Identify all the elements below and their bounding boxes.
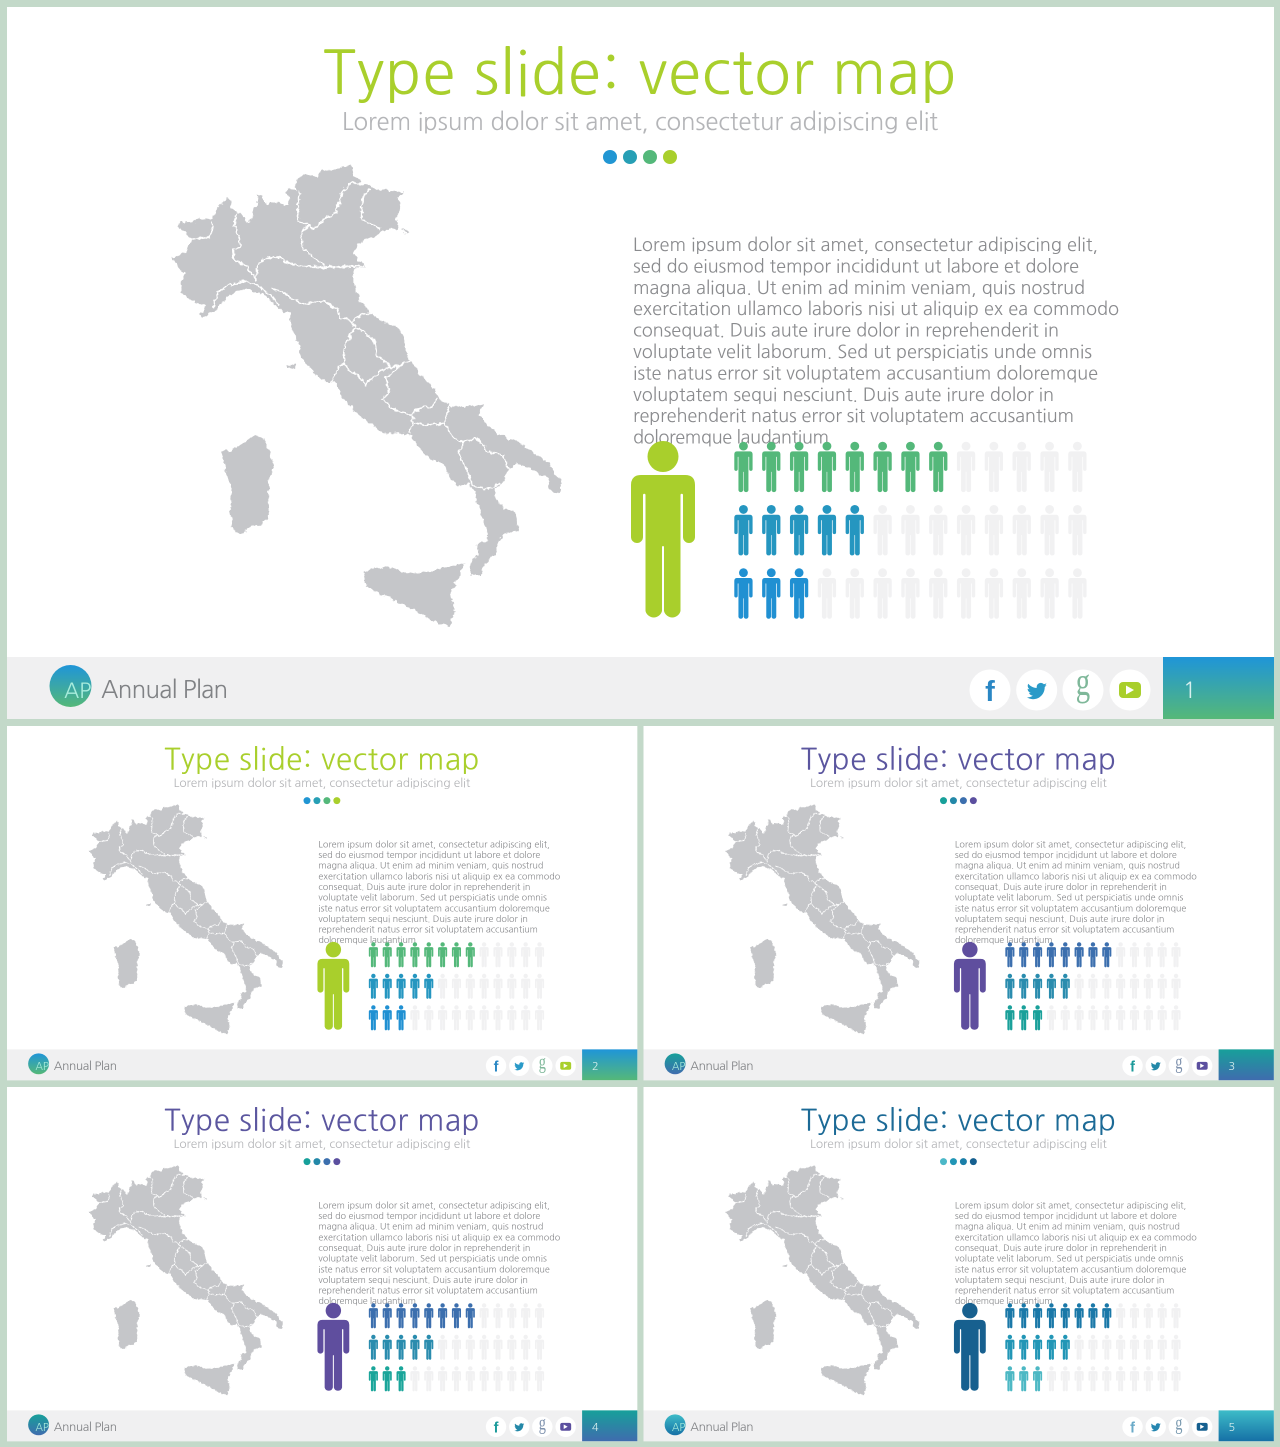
body text: magna aliqua. Ut enim ad minim veniam, quis nostrud [633,278,1085,297]
pictogram row 1: 8 of 13 [1005,942,1181,967]
logo badge: AP [64,681,91,702]
panel: slide 5 [644,1087,1274,1441]
pictogram row 2: 5 of 13 [369,1335,544,1360]
brand name: Annual Plan [54,1060,117,1072]
body text: Lorem ipsum dolor sit amet, consectetur adipiscing elit, [955,840,1186,849]
body text: iste natus error sit voluptatem accusantium doloremque [955,1265,1186,1274]
body text: exercitation ullamco laboris nisi ut aliquip ex ea commodo [955,1233,1197,1242]
subtitle: Lorem ipsum dolor sit amet, consectetur adipiscing elit [174,777,471,789]
brand name: Annual Plan [690,1421,753,1433]
footer bar [644,1410,1274,1441]
map of Italy [89,1165,283,1395]
page number box [1219,1049,1274,1080]
body text: sed do eiusmod tempor incididunt ut labore et dolore [633,256,1079,275]
footer bar [644,1049,1274,1080]
pictogram row 1: 8 of 13 [734,442,1087,492]
body text: Lorem ipsum dolor sit amet, consectetur adipiscing elit, [318,1201,550,1210]
body text: voluptatem sequi nesciunt. Duis aute irure dolor in [955,915,1164,924]
logo badge: AP [672,1061,685,1072]
pictogram row 3: 3 of 13 [734,568,1087,619]
body text: reprehenderit natus error sit voluptatem accusantium [955,926,1174,935]
page number box: 4 [592,1422,599,1433]
social icons [970,659,1150,710]
social icons [486,1051,576,1076]
social icons: f [1130,1420,1135,1436]
body text: magna aliqua. Ut enim ad minim veniam, quis nostrud [955,1223,1180,1232]
panel: slide 1 [7,7,1274,719]
pictogram row 1: 8 of 13 [369,942,544,967]
pagination dots [940,1158,977,1165]
body text: reprehenderit natus error sit voluptatem accusantium [318,1287,538,1296]
pagination dots [304,1158,340,1165]
body text: sed do eiusmod tempor incididunt ut labore et dolore [318,851,540,860]
body text: voluptatem sequi nesciunt. Duis aute irure dolor in [318,1276,528,1285]
title: Type slide: vector map [323,43,957,103]
title: Type slide: vector map [164,1105,480,1135]
large person icon [954,942,986,1030]
page number box: 2 [592,1061,599,1072]
brand name: Annual Plan [690,1060,753,1072]
body text [318,1201,561,1306]
body text: voluptatem sequi nesciunt. Duis aute irure dolor in [633,385,1054,404]
body text: consequat. Duis aute irure dolor in reprehenderit in [633,321,1059,340]
pictogram row 3: 3 of 13 [1005,1005,1181,1030]
body text: doloremque laudantium [318,936,416,945]
pictogram row 2: 5 of 13 [1005,1335,1181,1360]
social icons: f [985,676,995,708]
body text: voluptatem sequi nesciunt. Duis aute irure dolor in [318,915,528,924]
body text [318,840,561,945]
page number box [1219,1410,1274,1441]
large person icon [954,1303,986,1391]
footer bar [7,657,1274,719]
social icons: g [1175,1412,1183,1434]
body text [633,235,1119,447]
large person icon [631,441,695,617]
body text: reprehenderit natus error sit voluptatem accusantium [633,406,1074,425]
subtitle: Lorem ipsum dolor sit amet, consectetur adipiscing elit [810,777,1107,789]
logo badge [665,1414,686,1435]
body text: magna aliqua. Ut enim ad minim veniam, quis nostrud [318,1223,543,1232]
body text: voluptatem sequi nesciunt. Duis aute irure dolor in [955,1276,1164,1285]
social icons: f [494,1420,499,1436]
body text: Lorem ipsum dolor sit amet, consectetur adipiscing elit, [633,235,1098,254]
pictogram row 1: 8 of 13 [1005,1303,1181,1328]
body text: Lorem ipsum dolor sit amet, consectetur adipiscing elit, [318,840,550,849]
brand name: Annual Plan [101,678,228,702]
body text: voluptate velit laborum. Sed ut perspiciatis unde omnis [318,894,547,903]
map of Italy [89,804,283,1034]
footer bar [7,1410,637,1441]
brand name: Annual Plan [54,1421,117,1433]
pictogram row 1: 8 of 13 [369,1303,544,1328]
body text [955,1201,1197,1306]
pictogram row 3: 3 of 13 [369,1005,544,1030]
subtitle: Lorem ipsum dolor sit amet, consectetur adipiscing elit [342,110,938,134]
body text: magna aliqua. Ut enim ad minim veniam, quis nostrud [318,862,543,871]
pagination dots [940,797,977,804]
body text: exercitation ullamco laboris nisi ut aliquip ex ea commodo [318,1233,561,1242]
pagination dots [304,797,340,804]
page number box: 5 [1229,1422,1235,1433]
body text: iste natus error sit voluptatem accusantium doloremque [318,904,550,913]
large person icon [317,1303,349,1391]
page number box [582,1410,637,1441]
body text: iste natus error sit voluptatem accusantium doloremque [318,1265,550,1274]
body text: voluptate velit laborum. Sed ut perspiciatis unde omnis [633,342,1092,361]
logo badge [28,1053,49,1074]
page number box: 3 [1229,1061,1235,1072]
page number box [582,1049,637,1080]
logo badge [665,1053,686,1074]
body text: sed do eiusmod tempor incididunt ut labore et dolore [955,1212,1177,1221]
pictogram row 3: 3 of 13 [369,1366,544,1391]
subtitle: Lorem ipsum dolor sit amet, consectetur adipiscing elit [810,1138,1107,1150]
pictogram row 3: 3 of 13 [1005,1366,1181,1391]
body text: consequat. Duis aute irure dolor in reprehenderit in [318,1244,530,1253]
body text: doloremque laudantium [955,936,1052,945]
body text: iste natus error sit voluptatem accusantium doloremque [633,363,1098,382]
title: Type slide: vector map [164,744,480,774]
panel: slide 2 [7,726,637,1080]
logo badge: AP [35,1061,49,1072]
social icons: g [1076,659,1090,704]
large person icon [317,942,349,1030]
social icons [1122,1051,1212,1076]
social icons: f [1130,1059,1135,1075]
title: Type slide: vector map [801,1105,1116,1135]
title: Type slide: vector map [801,744,1116,774]
body text: doloremque laudantium [955,1297,1052,1306]
logo badge: AP [35,1422,49,1433]
body text: iste natus error sit voluptatem accusantium doloremque [955,904,1186,913]
social icons [1122,1412,1212,1437]
social icons: g [1175,1051,1183,1073]
subtitle: Lorem ipsum dolor sit amet, consectetur adipiscing elit [174,1138,471,1150]
body text [955,840,1197,945]
body text: reprehenderit natus error sit voluptatem accusantium [318,926,538,935]
social icons: g [539,1412,546,1434]
body text: consequat. Duis aute irure dolor in reprehenderit in [955,1244,1167,1253]
panel: slide 3 [644,726,1274,1080]
body text: exercitation ullamco laboris nisi ut aliquip ex ea commodo [318,872,561,881]
body text: exercitation ullamco laboris nisi ut aliquip ex ea commodo [955,872,1197,881]
body text: reprehenderit natus error sit voluptatem accusantium [955,1287,1174,1296]
body text: magna aliqua. Ut enim ad minim veniam, quis nostrud [955,862,1180,871]
social icons [486,1412,576,1437]
pictogram row 2: 5 of 13 [1005,974,1181,999]
body text: sed do eiusmod tempor incididunt ut labore et dolore [955,851,1177,860]
page number box: 1 [1183,680,1196,702]
logo badge [28,1414,49,1435]
panel: slide 4 [7,1087,637,1441]
pictogram row 2: 5 of 13 [734,505,1087,555]
body text: doloremque laudantium [633,428,829,447]
body text: doloremque laudantium [318,1297,416,1306]
pagination dots [603,150,677,164]
pictogram row 2: 5 of 13 [369,974,544,999]
body text: voluptate velit laborum. Sed ut perspiciatis unde omnis [318,1255,547,1264]
body text: sed do eiusmod tempor incididunt ut labore et dolore [318,1212,540,1221]
body text: voluptate velit laborum. Sed ut perspiciatis unde omnis [955,1255,1183,1264]
body text: consequat. Duis aute irure dolor in reprehenderit in [955,883,1167,892]
map of Italy [172,164,563,627]
logo badge: AP [672,1422,685,1433]
social icons: g [539,1051,546,1073]
page number box [1163,657,1274,719]
body text: Lorem ipsum dolor sit amet, consectetur adipiscing elit, [955,1201,1186,1210]
body text: voluptate velit laborum. Sed ut perspiciatis unde omnis [955,894,1183,903]
footer bar [7,1049,637,1080]
body text: exercitation ullamco laboris nisi ut aliquip ex ea commodo [633,299,1119,318]
logo badge [50,665,92,707]
map of Italy [725,804,920,1034]
map of Italy [725,1165,920,1395]
social icons: f [494,1059,499,1075]
body text: consequat. Duis aute irure dolor in reprehenderit in [318,883,530,892]
